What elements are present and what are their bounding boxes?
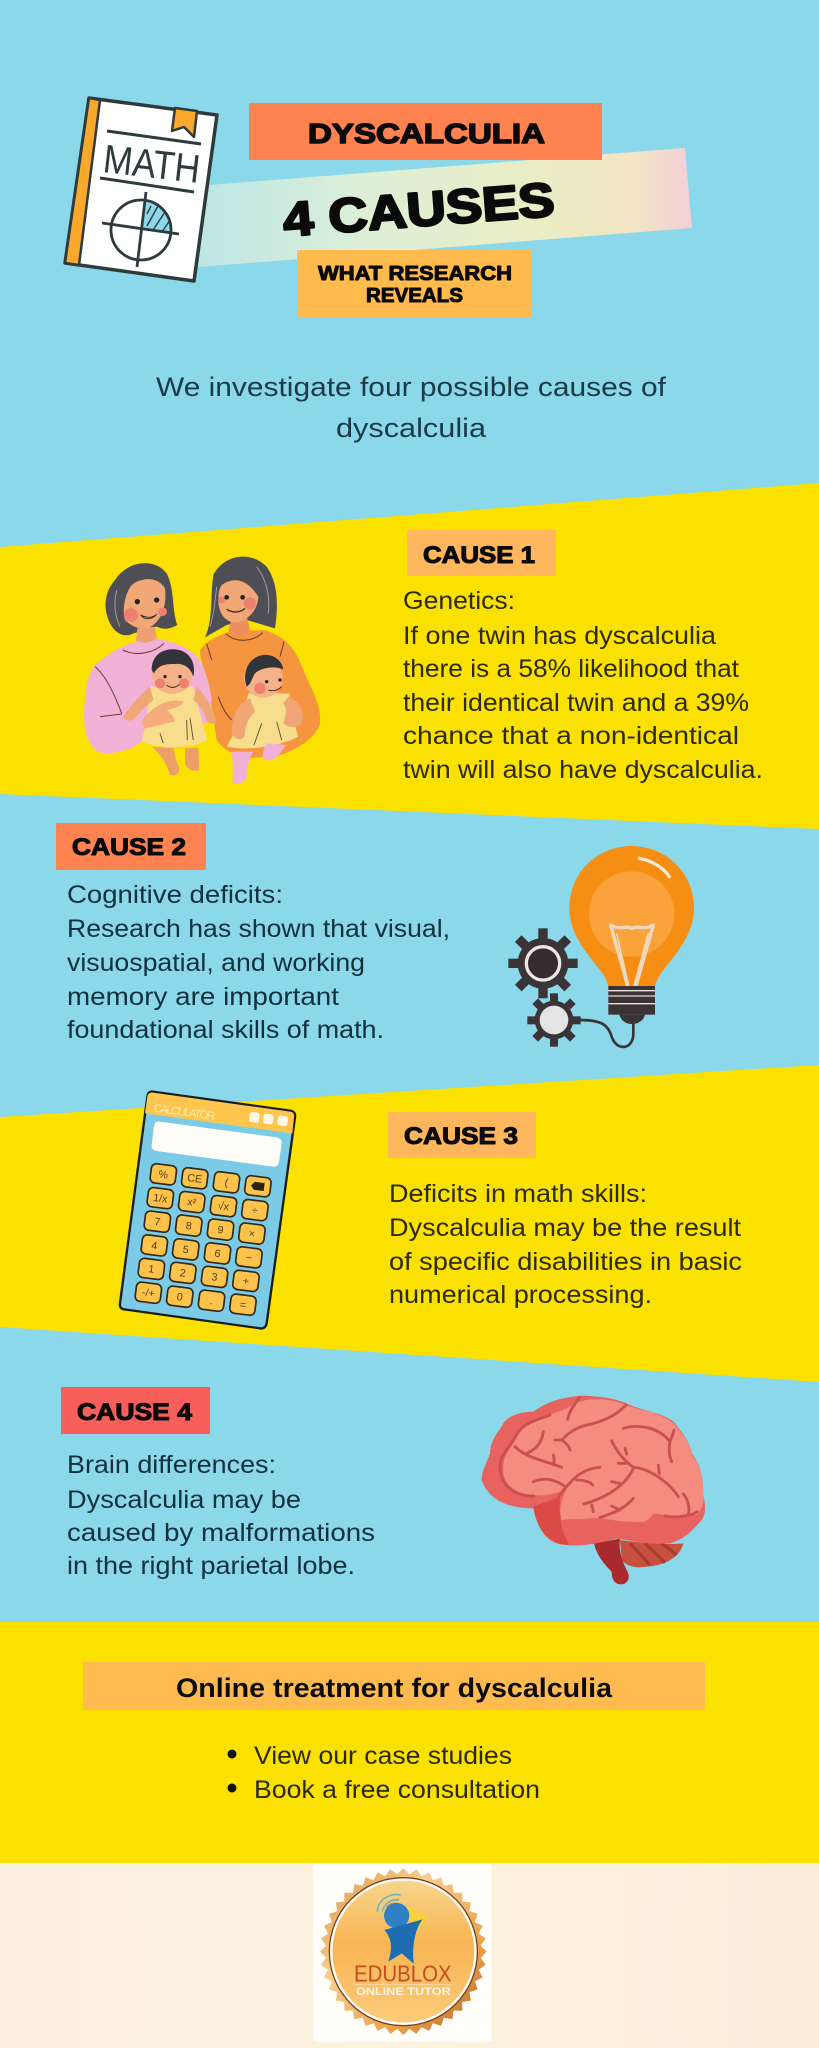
icon: calculator: ÷ (251, 1204, 259, 1217)
text: brain differences (67, 1451, 375, 1580)
panel: cause 3 math skills (0, 1065, 819, 1382)
text: genetics (403, 587, 763, 784)
badge: cause 4 (61, 1387, 210, 1434)
heading: 4 causes: 4 CAUSES (281, 174, 556, 247)
subtitle: what research reveals: WHAT RESEARCH (318, 263, 512, 285)
text: brain differences: Dyscalculia may be (67, 1486, 301, 1514)
heading: online treatment: Online treatment for dyscalculia (176, 1673, 613, 1703)
subtitle: what research reveals: REVEALS (366, 285, 463, 307)
text: deficits in math skills: Deficits in math skills: (389, 1180, 647, 1208)
text: deficits in math skills: Dyscalculia may be the result (389, 1214, 741, 1242)
intro text (156, 372, 667, 443)
icon: calculator: 6 (214, 1248, 221, 1260)
icon: calculator: . (209, 1295, 214, 1308)
text: genetics: Genetics: (403, 587, 515, 615)
text: deficits in math skills: of specific disabilities in basic (389, 1248, 742, 1276)
text: deficits in math skills (389, 1180, 742, 1309)
yellow band (0, 1065, 819, 1382)
icon: calculator: 5 (182, 1244, 189, 1256)
badge: cause 1: CAUSE 1 (423, 542, 535, 569)
footer strip (0, 1863, 819, 2048)
badge: cause 2: CAUSE 2 (72, 834, 186, 861)
icon: calculator: + (242, 1275, 250, 1288)
text: cognitive deficits: memory are important (67, 983, 339, 1011)
logo: edublox online tutor seal: EDUBLOX (354, 1961, 452, 1987)
subtitle: what research reveals (297, 250, 532, 317)
logo: edublox online tutor seal: ONLINE TUTOR (356, 1986, 451, 1998)
icon: calculator: × (248, 1228, 256, 1241)
badge: cause 2 (56, 823, 206, 870)
icon: calculator: 4 (151, 1240, 158, 1252)
text: cognitive deficits (67, 881, 450, 1044)
badge: cause 4: CAUSE 4 (77, 1399, 193, 1426)
icon: calculator: 9 (217, 1224, 224, 1237)
title banner: dyscalculia: DYSCALCULIA (308, 118, 545, 149)
icon: calculator: 1/x (152, 1192, 169, 1206)
icon: calculator: − (245, 1252, 253, 1264)
icon: calculator: CE (187, 1172, 203, 1186)
icon: calculator: CALCULATOR (153, 1103, 216, 1123)
logo: edublox online tutor seal (313, 1864, 492, 2042)
icon: calculator: = (239, 1299, 247, 1312)
badge: cause 3: CAUSE 3 (404, 1123, 518, 1150)
badge: cause 3 (388, 1112, 536, 1158)
text: cognitive deficits: Research has shown that visual, (67, 915, 450, 943)
text: brain differences: in the right parietal lobe. (67, 1552, 355, 1580)
text: brain differences: Brain differences: (67, 1451, 276, 1479)
icon: calculator: 7 (154, 1216, 161, 1229)
text: genetics: there is a 58% likelihood that (403, 655, 739, 683)
panel: cause 4 brain differences (61, 1387, 705, 1584)
panel: online treatment call to action (0, 1622, 819, 1863)
icon: light bulb and gears (508, 846, 694, 1047)
badge: cause 1 (407, 530, 556, 576)
icon: calculator: -/+ (141, 1287, 155, 1300)
icon: calculator: 3 (211, 1271, 218, 1284)
text: genetics: their identical twin and a 39% (403, 689, 749, 717)
intro text: dyscalculia (336, 413, 487, 443)
icon: calculator: 2 (179, 1267, 186, 1280)
illustration: mothers with twin babies (84, 557, 320, 784)
icon: calculator (120, 1092, 295, 1328)
title banner: dyscalculia (249, 103, 602, 160)
intro text: We investigate four possible causes of (156, 372, 667, 402)
bullet list: View our case studies (254, 1742, 512, 1770)
gradient ribbon (198, 148, 692, 267)
text: genetics: twin will also have dyscalculia. (403, 756, 763, 784)
icon: calculator: √x (217, 1200, 230, 1214)
heading: online treatment (83, 1662, 705, 1710)
panel: cause 1 genetics (0, 483, 819, 829)
bullet list (228, 1742, 540, 1804)
icon: calculator: % (158, 1168, 169, 1182)
icon: brain (482, 1396, 705, 1584)
header: title block (65, 98, 692, 317)
text: cognitive deficits: foundational skills of math. (67, 1016, 384, 1044)
bullet list: Book a free consultation (254, 1776, 540, 1804)
icon: calculator: 0 (176, 1291, 183, 1304)
icon: math book (65, 98, 217, 281)
text: cognitive deficits: visuospatial, and working (67, 949, 365, 977)
icon: calculator: ( (224, 1177, 229, 1189)
text: cognitive deficits: Cognitive deficits: (67, 881, 283, 909)
text: genetics: If one twin has dyscalculia (403, 622, 716, 650)
yellow band (0, 1622, 819, 1863)
icon: math book: MATH (101, 137, 202, 192)
icon: calculator: 1 (148, 1263, 155, 1276)
icon: calculator: x² (186, 1196, 197, 1209)
icon: calculator: 8 (185, 1220, 192, 1233)
panel: cause 2 cognitive deficits (56, 823, 694, 1047)
text: brain differences: caused by malformations (67, 1519, 375, 1547)
text: deficits in math skills: numerical processing. (389, 1281, 652, 1309)
yellow band (0, 483, 819, 829)
text: genetics: chance that a non-identical (403, 722, 739, 750)
